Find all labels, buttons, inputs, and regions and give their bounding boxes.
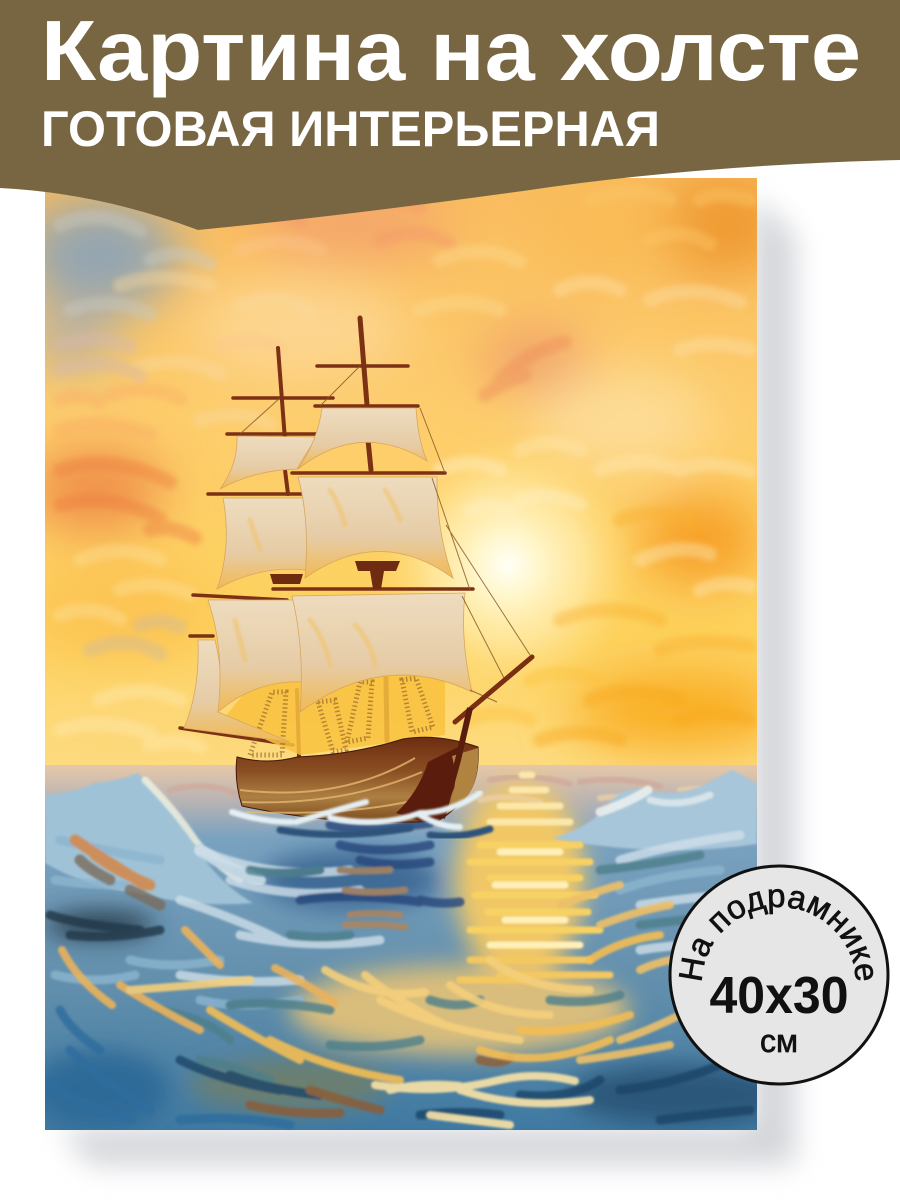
sky brush strokes	[60, 192, 750, 747]
distant waves	[170, 777, 740, 804]
painting sea	[30, 765, 790, 1130]
sail: fore main	[292, 593, 472, 712]
badge size: 40x30	[710, 967, 848, 1025]
painting sky	[20, 175, 790, 778]
stem	[442, 708, 470, 818]
left wave	[45, 773, 253, 904]
right wave	[552, 770, 757, 850]
sky behind lower sails	[226, 676, 445, 755]
badge curved label: На подрамнике	[678, 888, 874, 980]
sail: fore top	[298, 408, 427, 469]
sun reflection strokes	[460, 775, 610, 980]
rigging	[240, 366, 530, 702]
gold wave strokes	[62, 885, 700, 1125]
ship	[180, 318, 532, 836]
sail highlights	[235, 490, 400, 665]
badge unit: см	[760, 1023, 798, 1059]
hull	[236, 737, 478, 822]
hull planks	[240, 758, 422, 813]
sail: aft main	[208, 600, 303, 712]
badge: size on stretcher	[668, 864, 890, 1086]
bow dark plating	[396, 746, 460, 821]
sail: fore middle	[298, 477, 453, 578]
wave crest highlights	[145, 780, 710, 880]
masts and yards	[180, 318, 473, 756]
bow gold planks	[446, 748, 478, 814]
sails	[184, 408, 472, 742]
tops (mast platforms)	[270, 561, 400, 589]
blue wave strokes	[50, 823, 750, 1125]
title: Картина на холсте	[41, 4, 861, 99]
sail: spanker	[184, 640, 290, 742]
sail: aft middle	[217, 498, 309, 589]
bowsprit	[455, 657, 532, 722]
header banner	[0, 0, 900, 230]
subtitle: ГОТОВАЯ ИНТЕРЬЕРНАЯ	[41, 101, 660, 157]
painting: ship at sunset	[20, 175, 790, 1130]
canvas drop shadow	[60, 195, 795, 1165]
foam at hull	[232, 793, 490, 836]
ratlines	[250, 678, 433, 755]
sail: aft top	[220, 436, 317, 489]
